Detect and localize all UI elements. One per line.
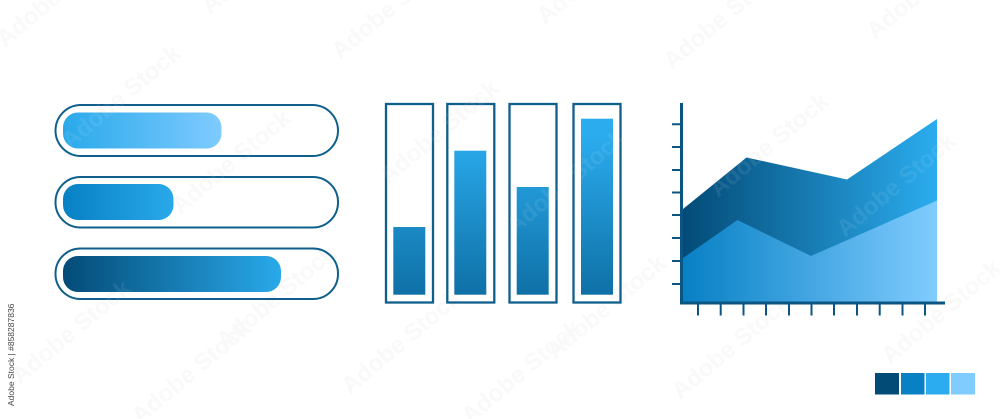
watermark over coloured shapes: Adobe Stock — [375, 74, 505, 190]
faint background watermark: Adobe Stock — [832, 127, 962, 243]
watermark over coloured shapes: Adobe Stock — [57, 39, 187, 155]
faint background watermark: Adobe Stock — [705, 87, 835, 203]
watermark over coloured shapes: Adobe Stock — [832, 127, 962, 243]
progress pill 2 — [56, 177, 338, 228]
faint background watermark: Adobe Stock — [212, 239, 342, 355]
panel: vertical bar chart — [386, 104, 620, 302]
light area series — [683, 200, 937, 302]
watermark over coloured shapes: Adobe Stock — [7, 274, 137, 390]
faint background watermark: Adobe Stock — [57, 39, 187, 155]
faint background watermark: Adobe Stock — [7, 274, 137, 390]
bar 1 — [386, 104, 433, 302]
panel: horizontal progress pills — [56, 105, 338, 299]
axes and tick marks — [672, 103, 945, 316]
bar 2 — [447, 104, 494, 302]
faint background watermark: Adobe Stock — [337, 284, 467, 400]
panel: area chart — [672, 103, 945, 316]
bar 4 — [574, 104, 620, 302]
dark area series — [683, 119, 937, 302]
watermark over coloured shapes: Adobe Stock — [502, 124, 632, 240]
faint background watermark: Adobe Stock — [375, 74, 505, 190]
progress pill 3 — [56, 248, 338, 299]
stock id side label: Adobe Stock | #858287836 — [6, 303, 16, 406]
faint background watermark: Adobe Stock — [542, 249, 672, 365]
progress pill 1 — [56, 105, 338, 156]
colour palette swatches — [875, 373, 975, 394]
watermark over coloured shapes: Adobe Stock — [705, 87, 835, 203]
watermark over coloured shapes: Adobe Stock — [167, 104, 297, 220]
faint background watermark: Adobe Stock — [167, 104, 297, 220]
faint background watermark: Adobe Stock — [667, 289, 797, 405]
watermark over coloured shapes — [7, 39, 962, 390]
bar 3 — [510, 104, 556, 302]
